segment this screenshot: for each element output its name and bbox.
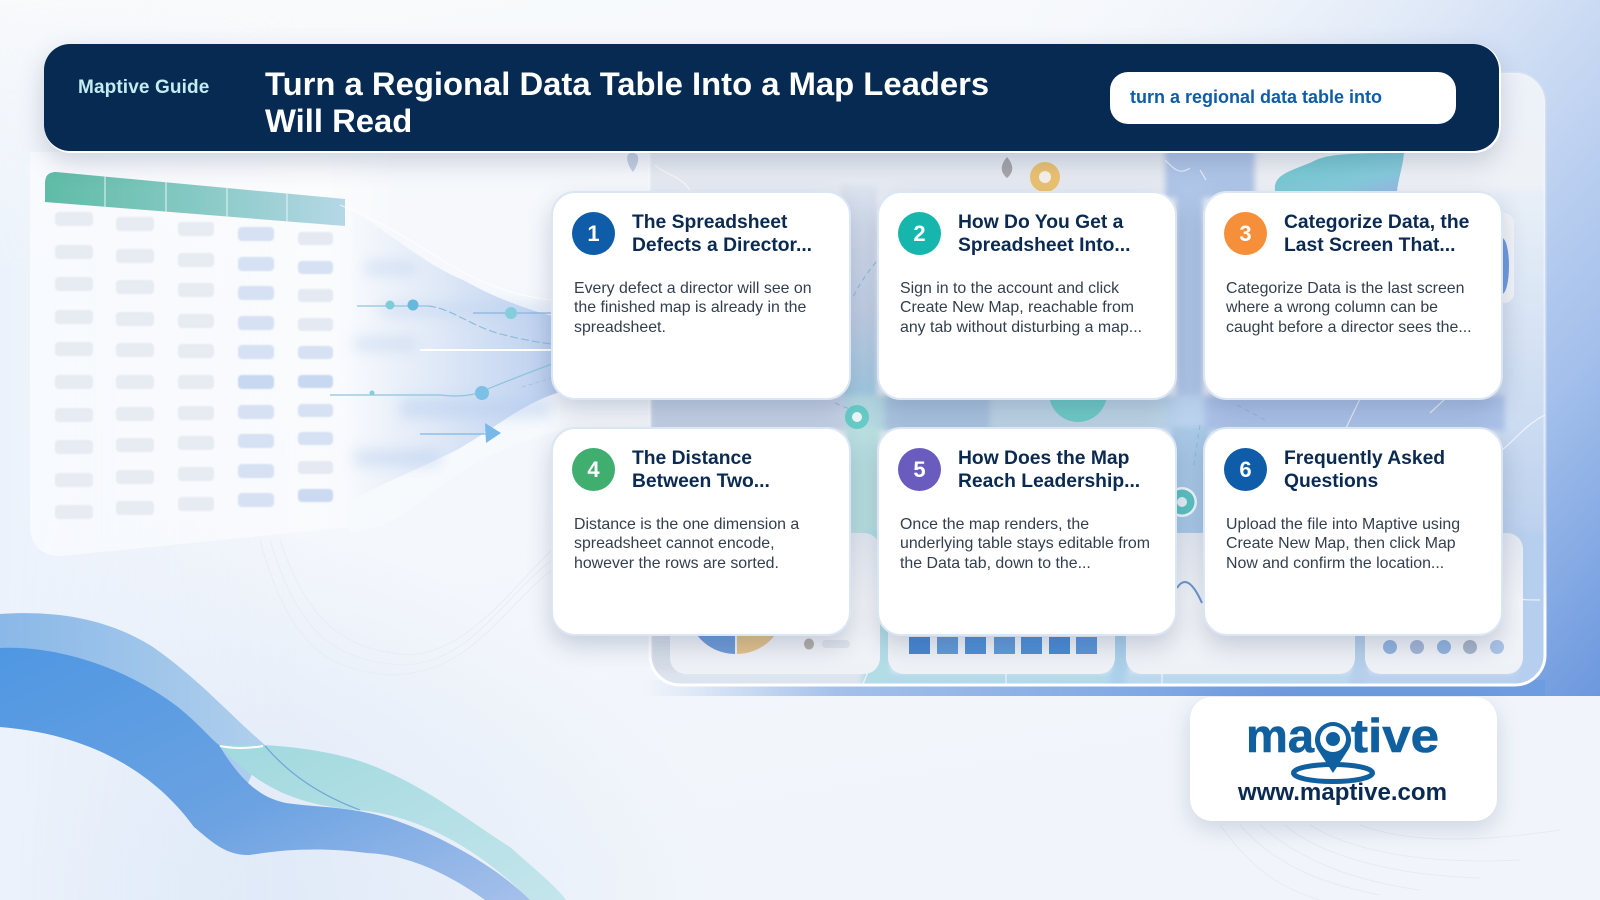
card 1 text: [574, 280, 812, 336]
card 4 text: [574, 516, 800, 572]
map pin: teal left: [845, 405, 869, 429]
card 3 heading: Last Screen That...: [1284, 234, 1455, 256]
card 2 heading: Spreadsheet Into...: [958, 234, 1130, 256]
card 5: [877, 427, 1177, 636]
card 1 text: spreadsheet.: [574, 319, 666, 336]
step number 1: [572, 212, 615, 255]
logo card: [1190, 697, 1497, 821]
step number 5: [898, 448, 941, 491]
eyebrow label: Maptive Guide: [78, 77, 209, 98]
card 1 text: Every defect a director will see on: [574, 280, 812, 296]
logo wordmark: tive: [1351, 709, 1439, 762]
card 3: [1203, 191, 1503, 400]
map lake: [1275, 153, 1404, 191]
dashboard widget: bar blocks: [888, 533, 1115, 674]
card 1: [551, 191, 851, 400]
step number 5: 5: [913, 457, 926, 482]
spreadsheet header row: [45, 172, 345, 226]
logo wordmark: ma: [1246, 709, 1315, 762]
contour lines, bottom right: [1220, 825, 1560, 900]
map side widget with donut: [1480, 213, 1514, 303]
card 3 text: caught before a director sees the...: [1226, 319, 1472, 336]
card 3 heading: [1284, 212, 1469, 256]
main title: [265, 65, 989, 139]
card 6 heading: Questions: [1284, 470, 1378, 492]
card 1 heading: [632, 212, 812, 256]
card 5 heading: [958, 448, 1140, 492]
card 1 heading: The Spreadsheet: [632, 212, 787, 233]
step number 2: [898, 212, 941, 255]
blue wave ribbon, bottom left: [0, 613, 566, 900]
map pin: yellow: [1030, 162, 1060, 192]
main title: Turn a Regional Data Table Into a Map Leaders: [265, 65, 989, 102]
card 5 text: the Data tab, down to the...: [900, 555, 1091, 572]
logo pin: [1294, 722, 1372, 782]
spreadsheet rows: [55, 212, 333, 519]
step number 3: 3: [1239, 221, 1252, 246]
card 6: [1203, 427, 1503, 636]
step number 4: [572, 448, 615, 491]
card 6 heading: [1284, 448, 1445, 492]
card 1 text: the finished map is already in the: [574, 299, 806, 316]
step number 1: 1: [587, 221, 600, 246]
dashboard widget: dots: [1365, 533, 1523, 674]
flow nodes: [370, 300, 517, 400]
card 2 text: any tab without disturbing a map...: [900, 319, 1142, 336]
step number 2: 2: [913, 221, 926, 246]
main title: Will Read: [265, 102, 412, 139]
card 2 heading: How Do You Get a: [958, 212, 1123, 233]
maptive logo: [1237, 709, 1447, 806]
card 1 heading: Defects a Director...: [632, 234, 812, 256]
dashboard widget: line chart panel: [1126, 533, 1355, 674]
card 6 text: Upload the file into Maptive using: [1226, 516, 1460, 532]
website url: www.maptive.com: [1237, 779, 1447, 806]
card 3 text: [1226, 280, 1472, 336]
card 5 text: underlying table stays editable from: [900, 535, 1150, 552]
card 2 text: [900, 280, 1142, 336]
map dashboard frame: [640, 73, 1555, 692]
step number 4: 4: [587, 457, 600, 482]
card 5 text: Once the map renders, the: [900, 516, 1089, 532]
step number 6: 6: [1239, 457, 1252, 482]
map marker: grey drop: [1002, 157, 1012, 178]
card 4: [551, 427, 851, 636]
card 5 text: [900, 516, 1150, 572]
search keyword pill: [1110, 72, 1456, 124]
card 4 heading: [632, 448, 770, 492]
logo wordmark: [1246, 709, 1439, 762]
card 6 text: Create New Map, then click Map: [1226, 535, 1456, 552]
map teal region: [1050, 400, 1106, 422]
dashboard widget: pie chart: [670, 533, 880, 674]
card 4 heading: The Distance: [632, 448, 752, 469]
card 6 text: [1226, 516, 1460, 572]
card 2: [877, 191, 1177, 400]
card 4 heading: Between Two...: [632, 470, 770, 492]
search keyword pill: turn a regional data table into: [1130, 87, 1382, 107]
step number 3: [1224, 212, 1267, 255]
step number 6: [1224, 448, 1267, 491]
card 2 text: Sign in to the account and click: [900, 280, 1119, 296]
card 2 heading: [958, 212, 1130, 256]
card 5 heading: How Does the Map: [958, 448, 1129, 469]
flow arrow: [485, 423, 501, 443]
card 3 text: where a wrong column can be: [1226, 299, 1438, 316]
spreadsheet panel: [30, 152, 400, 556]
card 4 text: spreadsheet cannot encode,: [574, 535, 775, 552]
map pin: teal right: [1167, 487, 1197, 517]
faint flow lines: [260, 540, 552, 675]
card 2 text: Create New Map, reachable from: [900, 299, 1134, 316]
card 4 text: however the rows are sorted.: [574, 555, 779, 572]
card 6 text: Now and confirm the location...: [1226, 555, 1444, 572]
card 6 heading: Frequently Asked: [1284, 448, 1445, 469]
card 5 heading: Reach Leadership...: [958, 470, 1140, 492]
card 3 text: Categorize Data is the last screen: [1226, 280, 1464, 296]
map marker: grey drop left: [627, 153, 638, 172]
card 3 heading: Categorize Data, the: [1284, 212, 1469, 233]
data flow ribbons into cards: [330, 205, 560, 533]
header bar: [44, 44, 1499, 151]
card 4 text: Distance is the one dimension a: [574, 516, 799, 532]
